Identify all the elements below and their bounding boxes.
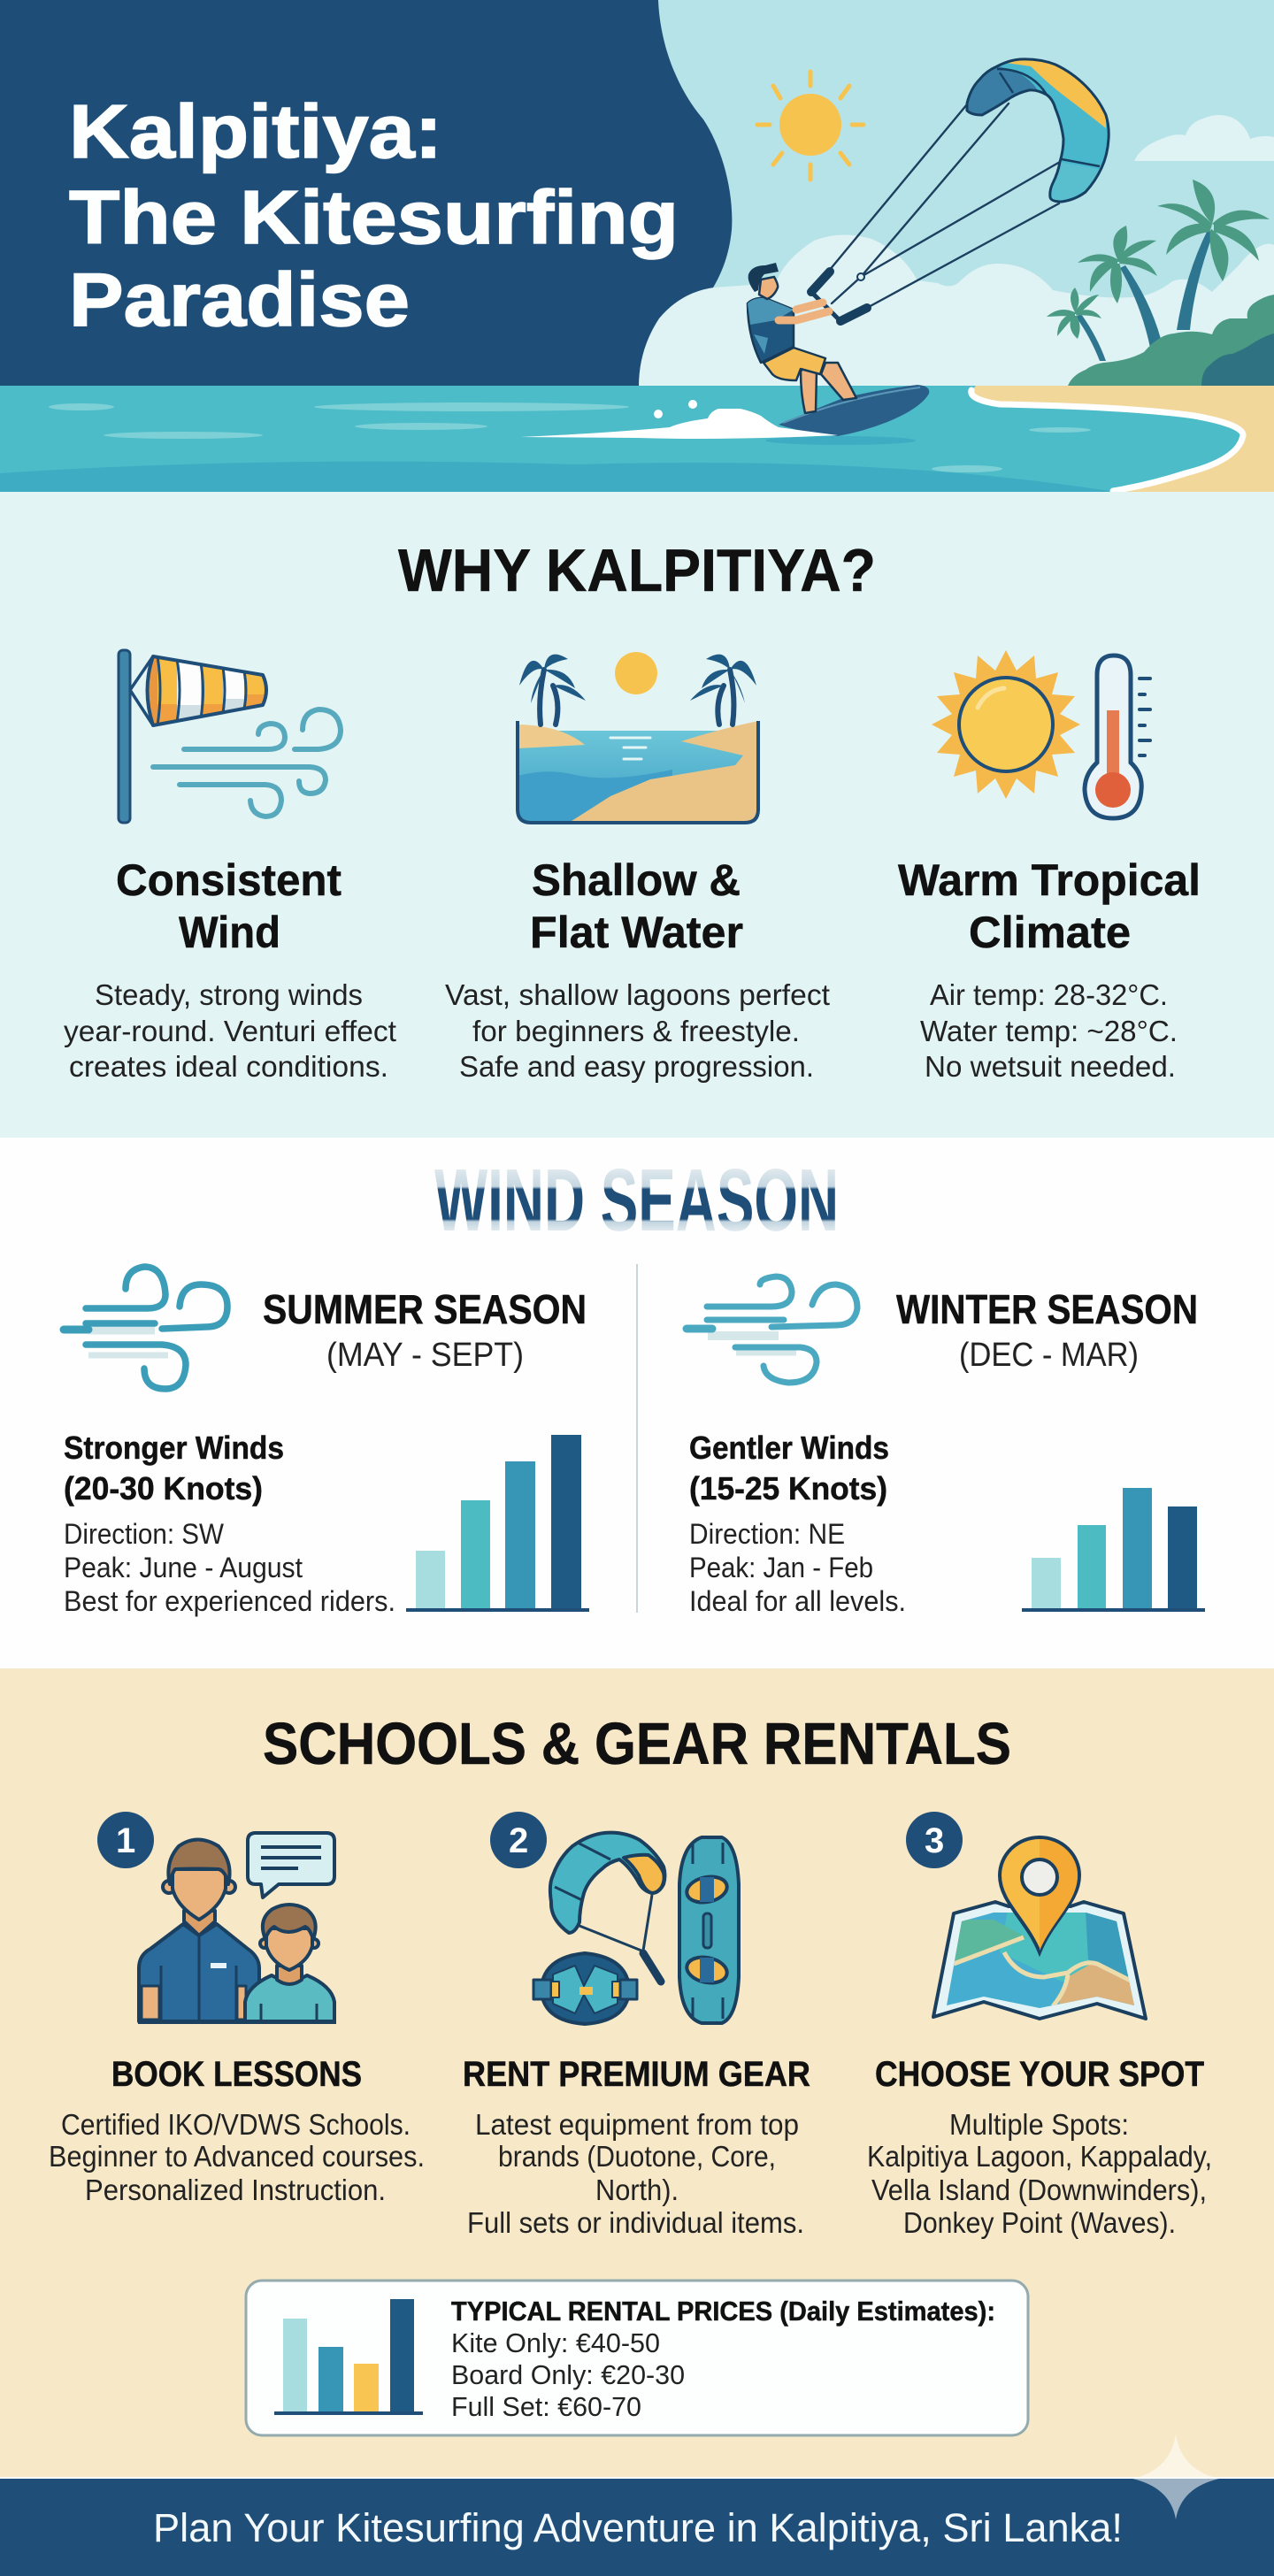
torso <box>748 298 794 363</box>
clouds behind rider <box>639 234 1274 387</box>
kite lines <box>829 104 1060 308</box>
icon: instructor and student <box>138 1833 336 2022</box>
panel: why kalpitiya <box>0 492 1274 1138</box>
column: warm tropical climate: No wetsuit needed. <box>925 1050 1176 1083</box>
badge: step 2: 2 <box>509 1821 528 1860</box>
column: shallow and flat water <box>445 855 830 1083</box>
sky <box>658 0 1274 387</box>
column: summer season: Stronger Winds <box>64 1430 284 1466</box>
column: winter season <box>689 1286 1198 1617</box>
water <box>0 386 1274 492</box>
column: winter season: Gentler Winds <box>689 1430 889 1466</box>
column: shallow and flat water: Safe and easy progression. <box>459 1050 814 1083</box>
heading: wind season: WIND SEASON <box>434 1151 839 1250</box>
shorts <box>764 348 825 380</box>
icon: windsock <box>119 650 341 823</box>
icon: map and pin <box>929 1837 1150 2019</box>
text: rental prices <box>451 2296 995 2422</box>
badge: step 3 <box>906 1812 963 1868</box>
column: rent premium gear <box>463 2055 810 2239</box>
column: warm tropical climate <box>898 855 1201 1083</box>
column: choose your spot: Multiple Spots: <box>949 2108 1129 2141</box>
column: choose your spot: Donkey Point (Waves). <box>903 2206 1176 2239</box>
column: consistent wind: Wind <box>179 908 280 957</box>
icon: winter wind <box>687 1276 857 1383</box>
column: warm tropical climate: Water temp: ~28°C. <box>920 1015 1178 1047</box>
panel: typical rental prices <box>246 2281 1028 2435</box>
icon: sun <box>757 72 863 180</box>
water ripples <box>49 402 1091 472</box>
badge: step 1: 1 <box>116 1821 135 1860</box>
column: summer season: SUMMER SEASON <box>263 1286 587 1332</box>
bar chart: summer wind strength <box>406 1435 589 1612</box>
heading: schools and gear rentals: SCHOOLS & GEAR RENTALS <box>263 1711 1011 1777</box>
text: rental prices: Board Only: €20-30 <box>451 2359 685 2390</box>
column: winter season: WINTER SEASON <box>896 1286 1198 1332</box>
icon: sparkle <box>1132 2434 1219 2519</box>
title: The Kitesurfing <box>69 176 679 260</box>
icon: palm trees <box>1047 180 1270 361</box>
beach <box>972 386 1274 492</box>
column: warm tropical climate: Warm Tropical <box>898 855 1201 905</box>
column: summer season: (MAY - SEPT) <box>326 1337 524 1374</box>
column: consistent wind: creates ideal conditions. <box>69 1050 388 1083</box>
icon: summer wind <box>64 1267 227 1389</box>
column: rent premium gear: Full sets or individual items. <box>467 2206 804 2239</box>
column: summer season: Direction: SW <box>64 1518 225 1550</box>
title <box>69 90 679 342</box>
column: shallow and flat water: Vast, shallow lagoons perfect <box>445 978 830 1011</box>
column: book lessons <box>49 2055 425 2206</box>
badge: step 1 <box>97 1812 154 1868</box>
heading: why kalpitiya: WHY KALPITIYA? <box>398 537 876 604</box>
panel: schools and gear rentals <box>0 1668 1274 2478</box>
title: Paradise <box>69 258 410 342</box>
footer banner <box>0 2477 1274 2576</box>
column: winter season: Direction: NE <box>689 1518 845 1550</box>
column: choose your spot: Vella Island (Downwinders), <box>871 2174 1207 2206</box>
column: warm tropical climate: Air temp: 28-32°C. <box>930 978 1168 1011</box>
panel: hero <box>0 0 1274 492</box>
hair <box>748 263 779 292</box>
column: book lessons: Personalized Instruction. <box>85 2174 386 2206</box>
text: rental prices: TYPICAL RENTAL PRICES (Daily Estimates): <box>451 2296 995 2327</box>
column: book lessons: Certified IKO/VDWS Schools. <box>61 2108 411 2141</box>
column: consistent wind <box>64 855 396 1083</box>
column: choose your spot: Kalpitiya Lagoon, Kappalady, <box>867 2140 1212 2173</box>
face <box>759 277 778 299</box>
column: winter season: (DEC - MAR) <box>959 1337 1139 1374</box>
column: shallow and flat water: for beginners & freestyle. <box>472 1015 800 1047</box>
island hills <box>1068 295 1274 386</box>
column: summer season <box>64 1286 587 1617</box>
column: rent premium gear: North). <box>595 2174 679 2206</box>
column: rent premium gear: Latest equipment from top <box>475 2108 799 2141</box>
column: warm tropical climate: Climate <box>969 908 1131 957</box>
column: choose your spot <box>867 2055 1212 2239</box>
bar chart: winter wind strength <box>1022 1488 1205 1612</box>
column: book lessons: BOOK LESSONS <box>111 2055 362 2094</box>
text: rental prices: Full Set: €60-70 <box>451 2391 641 2422</box>
splash <box>520 400 838 439</box>
footer banner: Plan Your Kitesurfing Adventure in Kalpitiya, Sri Lanka! <box>153 2505 1123 2550</box>
column: winter season: (15-25 Knots) <box>689 1470 887 1506</box>
icon: sun and thermometer <box>932 650 1150 818</box>
column: summer season: Best for experienced riders. <box>64 1585 395 1617</box>
board <box>779 385 929 436</box>
cloud upper right <box>1134 115 1274 161</box>
front leg <box>801 366 817 413</box>
column: book lessons: Beginner to Advanced courses. <box>49 2140 425 2173</box>
icon: kite <box>966 58 1110 203</box>
badge: step 3: 3 <box>925 1821 944 1860</box>
column: winter season: Peak: Jan - Feb <box>689 1552 873 1583</box>
column: rent premium gear: brands (Duotone, Core, <box>498 2140 776 2173</box>
arms <box>779 303 829 320</box>
column: choose your spot: CHOOSE YOUR SPOT <box>875 2055 1204 2094</box>
column: consistent wind: year-round. Venturi effect <box>64 1015 396 1047</box>
icon: control bar <box>811 272 867 321</box>
column: summer season: Peak: June - August <box>64 1552 303 1583</box>
column: shallow and flat water: Shallow & <box>532 855 741 905</box>
column: rent premium gear: RENT PREMIUM GEAR <box>463 2055 810 2094</box>
badge: step 2 <box>490 1812 547 1868</box>
title: Kalpitiya: <box>69 90 442 174</box>
icon: kitesurfer <box>748 263 929 436</box>
back leg <box>821 363 856 400</box>
column: winter season: Ideal for all levels. <box>689 1585 906 1617</box>
text: rental prices: Kite Only: €40-50 <box>451 2327 660 2358</box>
icon: kite, board and harness <box>533 1833 739 2024</box>
column: consistent wind: Steady, strong winds <box>95 978 363 1011</box>
column: summer season: (20-30 Knots) <box>64 1470 263 1506</box>
bar chart: rental prices <box>274 2299 423 2415</box>
column: shallow and flat water: Flat Water <box>530 908 743 957</box>
divider <box>636 1264 638 1613</box>
icon: lagoon <box>518 652 758 824</box>
panel: wind season <box>0 1138 1274 1668</box>
column: consistent wind: Consistent <box>116 855 342 905</box>
